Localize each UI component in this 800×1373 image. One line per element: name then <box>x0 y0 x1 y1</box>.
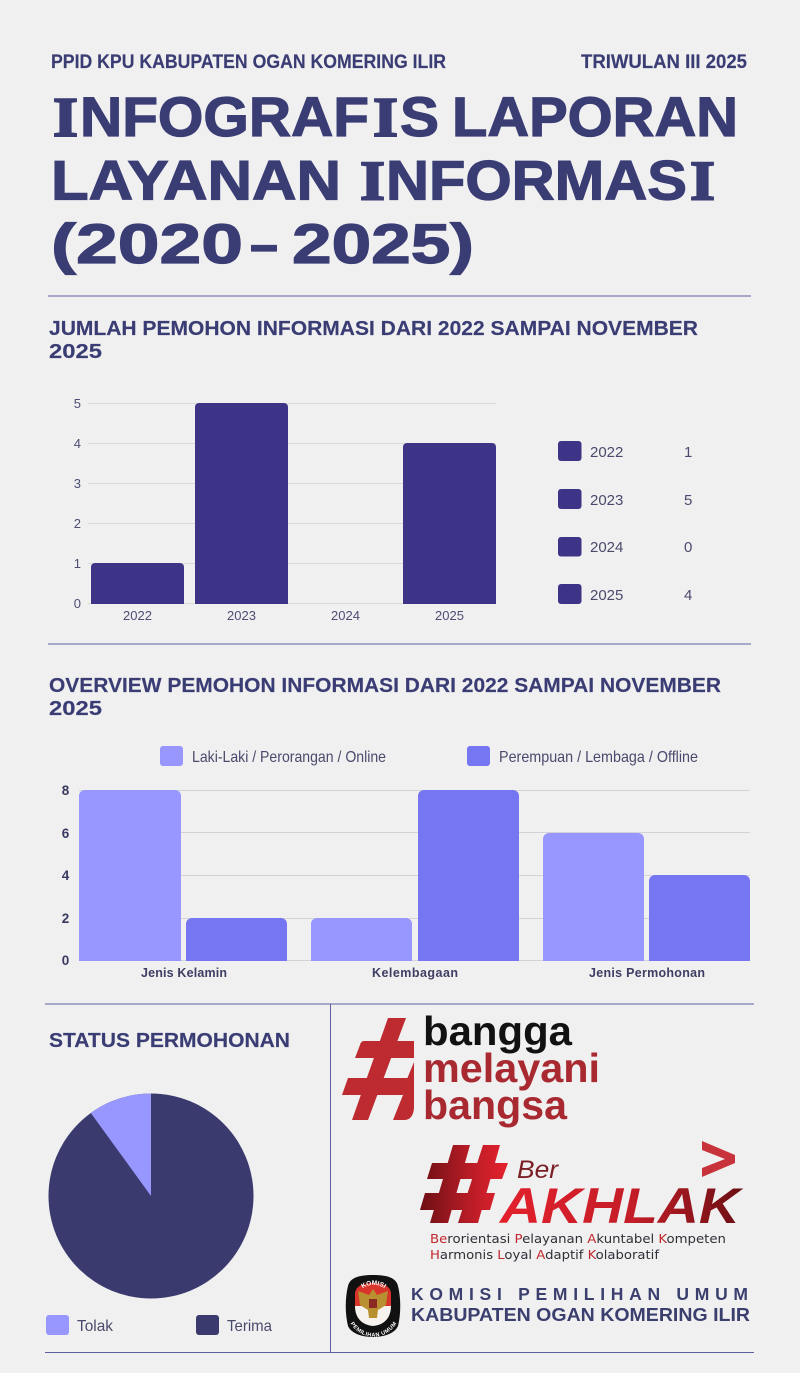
heading: jumlah pemohon: JUMLAH PEMOHON INFORMASI DARI 2022 SAMPAI NOVEMBER <box>49 318 699 340</box>
pie chart: status permohonan <box>48 1094 254 1298</box>
heading: jumlah pemohon <box>49 318 699 363</box>
bar 2025 <box>403 443 496 604</box>
legend: jumlah pemohon: 2023 <box>590 492 623 509</box>
organisation name: KOMISI PEMILIHAN UMUM <box>411 1284 748 1304</box>
organisation name: KABUPATEN OGAN KOMERING ILIR <box>411 1304 750 1325</box>
legend: status permohonan: Terima <box>227 1318 272 1335</box>
heading: status permohonan: STATUS PERMOHONAN <box>49 1029 290 1052</box>
logo: KPU emblem: PEMILIHAN UMUM <box>350 1322 396 1337</box>
logo: KPU emblem: KOMISI <box>360 1280 386 1288</box>
main title: (2020 <box>51 212 243 275</box>
bar chart: jumlah pemohon per tahun: 1 <box>74 556 81 571</box>
main title: NFOGRAF <box>80 85 369 148</box>
main title: I <box>690 150 715 212</box>
logo: KPU emblem <box>346 1275 400 1337</box>
bars: jenis kelamin <box>79 790 287 961</box>
organisation name <box>411 1284 750 1325</box>
grouped bar chart: overview: Kelembagaan <box>372 966 458 980</box>
grouped bar chart: overview: 6 <box>62 826 70 841</box>
bar chart: jumlah pemohon per tahun: 2 <box>74 516 81 531</box>
bar chart: jumlah pemohon per tahun: 2023 <box>227 608 256 623</box>
legend: jumlah pemohon <box>558 441 692 604</box>
heading: overview pemohon <box>49 675 722 720</box>
bars: kelembagaan <box>311 790 519 961</box>
legend: overview <box>160 746 698 766</box>
icon: gradient hash <box>420 1145 508 1223</box>
logo: bangga melayani bangsa: bangsa <box>423 1082 568 1128</box>
bar 2022 <box>91 563 184 604</box>
main title: NFORMAS <box>386 148 687 212</box>
bar chart: jumlah pemohon per tahun: 2024 <box>331 608 360 623</box>
heading: overview pemohon: 2025 <box>49 698 102 720</box>
grouped bar chart: overview: Jenis Permohonan <box>589 966 705 980</box>
bar chart: jumlah pemohon per tahun: 3 <box>74 476 81 491</box>
legend: overview: Laki-Laki / Perorangan / Online <box>192 749 386 766</box>
logo: BerAKHLAK: Berorientasi Pelayanan Akuntabel Kompeten <box>430 1232 726 1246</box>
heading: jumlah pemohon: 2025 <box>49 341 102 363</box>
main title: 2025) <box>292 212 474 275</box>
legend: jumlah pemohon: 2022 <box>590 444 623 461</box>
logo: BerAKHLAK <box>420 1141 744 1262</box>
grouped bar chart: overview: 0 <box>62 953 69 968</box>
main title: LAPORAN <box>452 85 738 148</box>
grouped bar chart: overview: 8 <box>62 783 70 798</box>
logo: bangga melayani bangsa: melayani <box>423 1045 600 1091</box>
logo: BerAKHLAK: AKHLAK <box>498 1178 744 1234</box>
main title <box>51 85 738 275</box>
legend: overview: Perempuan / Lembaga / Offline <box>499 749 698 766</box>
header period label: TRIWULAN III 2025 <box>581 51 747 73</box>
logo: bangga melayani bangsa: bangga <box>423 1008 573 1054</box>
main title: LAYANAN <box>51 148 341 212</box>
legend: status permohonan: Tolak <box>77 1318 114 1335</box>
header organisation label: PPID KPU KABUPATEN OGAN KOMERING ILIR <box>51 51 446 73</box>
grouped bar chart: overview: 4 <box>62 868 70 883</box>
bar chart: jumlah pemohon per tahun <box>74 396 496 623</box>
bar chart: jumlah pemohon per tahun: 2025 <box>435 608 464 623</box>
icon: red hash <box>342 1018 414 1120</box>
icon: chevron <box>702 1141 735 1177</box>
bar chart: jumlah pemohon per tahun: 0 <box>74 596 81 611</box>
main title: I <box>373 87 398 149</box>
logo: bangga melayani bangsa <box>342 1008 600 1128</box>
main title: – <box>250 212 278 275</box>
legend: status permohonan <box>46 1315 272 1335</box>
logo: BerAKHLAK: Harmonis Loyal Adaptif Kolaboratif <box>430 1248 660 1262</box>
legend: jumlah pemohon: 1 <box>684 444 692 461</box>
grouped bar chart: overview: Jenis Kelamin <box>141 966 227 980</box>
bar chart: jumlah pemohon per tahun: 4 <box>74 436 81 451</box>
main title: S <box>400 85 439 148</box>
bar chart: jumlah pemohon per tahun: 5 <box>74 396 81 411</box>
main title: I <box>53 87 78 149</box>
logo: BerAKHLAK: Ber <box>517 1156 560 1184</box>
bars: jenis permohonan <box>543 833 750 961</box>
legend: jumlah pemohon: 5 <box>684 492 692 509</box>
legend: jumlah pemohon: 4 <box>684 587 692 604</box>
legend: jumlah pemohon: 0 <box>684 539 692 556</box>
heading: overview pemohon: OVERVIEW PEMOHON INFORMASI DARI 2022 SAMPAI NOVEMBER <box>49 675 722 697</box>
main title: I <box>360 150 385 212</box>
grouped bar chart: overview: 2 <box>62 911 69 926</box>
legend: jumlah pemohon: 2025 <box>590 587 623 604</box>
legend: jumlah pemohon: 2024 <box>590 539 623 556</box>
grouped bar chart: overview <box>62 783 750 980</box>
bar 2023 <box>195 403 288 604</box>
bar chart: jumlah pemohon per tahun: 2022 <box>123 608 152 623</box>
